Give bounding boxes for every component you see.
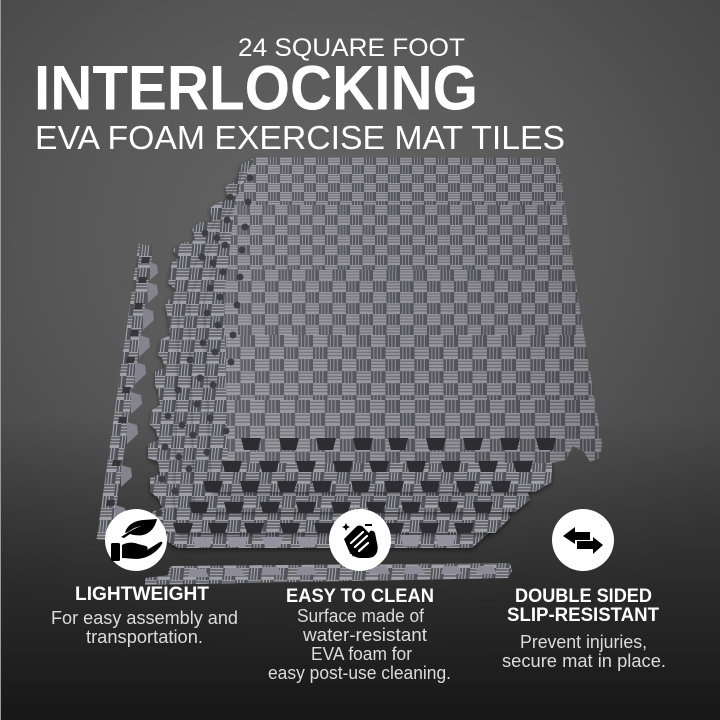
tile layer 4: [175, 180, 510, 533]
description: double sided slip-resistant: secure mat in place.: [502, 650, 666, 671]
heading: double sided slip-resistant: SLIP-RESISTANT: [507, 605, 659, 626]
description: easy to clean: Surface made of: [297, 605, 425, 626]
feature: lightweight: [51, 509, 238, 647]
tile layer 3: [190, 175, 530, 512]
heading: easy to clean: EASY TO CLEAN: [286, 586, 434, 607]
stacked mat tiles: [148, 150, 620, 548]
description: double sided slip-resistant: [502, 631, 666, 671]
side peg holes: [156, 174, 254, 516]
description: easy to clean: EVA foam for: [311, 643, 412, 664]
icon: swap arrows: [552, 509, 614, 571]
description: lightweight: transportation.: [86, 626, 203, 647]
interlock notches: [173, 438, 556, 533]
title: 24 square foot: 24 SQUARE FOOT: [238, 34, 465, 62]
feature: double sided slip-resistant: [502, 509, 666, 671]
description: easy to clean: water-resistant: [302, 624, 427, 645]
title block: [34, 34, 565, 156]
heading: lightweight: LIGHTWEIGHT: [75, 584, 209, 605]
bottom loose border strip: [145, 563, 512, 585]
heading: double sided slip-resistant: [507, 586, 659, 626]
heading: double sided slip-resistant: DOUBLE SIDED: [515, 586, 652, 607]
left loose border strip: [104, 245, 158, 540]
title: product line: EVA FOAM EXERCISE MAT TILES: [35, 119, 565, 156]
icon: hand holding leaf: [105, 509, 167, 571]
feature: easy to clean: [268, 509, 451, 683]
title: interlocking: INTERLOCKING: [34, 54, 478, 124]
description: easy to clean: [268, 605, 451, 683]
description: lightweight: For easy assembly and: [51, 607, 238, 628]
description: lightweight: [51, 607, 238, 647]
tile layer 1, top tile: [224, 157, 602, 463]
icon: washing hands: [329, 509, 391, 571]
description: double sided slip-resistant: Prevent injuries,: [520, 631, 647, 652]
tile layer 5: [148, 157, 492, 548]
tile layer 2: [205, 165, 552, 492]
front connector lobes: [192, 535, 456, 547]
description: easy to clean: easy post-use cleaning.: [268, 662, 451, 683]
